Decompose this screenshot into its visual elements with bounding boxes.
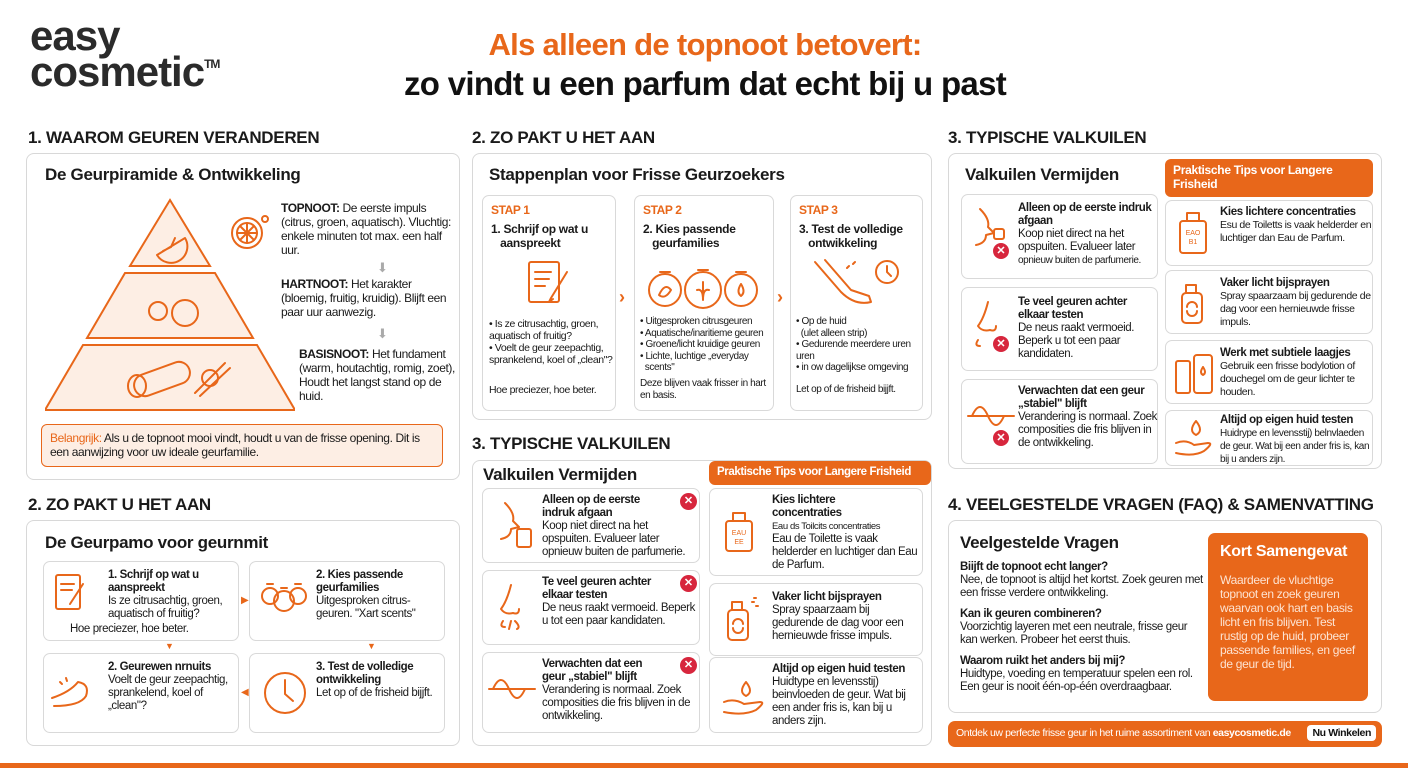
- card: tip 2: Vaker licht bijsprayen: [1220, 277, 1329, 289]
- card: tip 2: Vaker licht bijsprayen: [772, 591, 881, 603]
- card: fout 3: geur „stabiel" blijft: [542, 671, 637, 683]
- text: basisnoot: BASISNOOT: Het fundament (warm, houtachtig, romig, zoet), Houdt het langst stand op de huid.: [299, 347, 455, 403]
- card: fout 3: ✕: [684, 659, 693, 671]
- arrow down: ⬇: [377, 260, 388, 275]
- card: tip 4: [1165, 410, 1373, 466]
- panel: geurpamo: [26, 520, 460, 746]
- card: step 3: [249, 653, 445, 733]
- card: stap 2: • Aquatische/inaritieme geuren: [640, 328, 763, 338]
- pyramid chart: [45, 198, 295, 411]
- text: topnoot: TOPNOOT: De eerste impuls (citrus, groen, aquatisch). Vluchtig: enkele minuten tot max. een half uur.: [281, 201, 451, 257]
- faq text: Biijft de topnoot echt langer?: [960, 561, 1108, 573]
- heading: section 1: 1. WAAROM GEUREN VERANDEREN: [28, 128, 319, 147]
- summary box: [1208, 533, 1368, 701]
- card: tip 1: EAU: [732, 530, 746, 537]
- arrow right: ▶: [241, 595, 249, 606]
- card: step 3: 3. Test de volledige ontwikkeling: [316, 661, 413, 686]
- faq text: Voorzichtig layeren met een neutrale, frisse geur kan werken. Probeer het eerst thuis.: [960, 621, 1187, 646]
- icon: orange slice: [231, 215, 269, 249]
- panel heading: Veelgestelde Vragen: [960, 533, 1119, 552]
- card: tip 1: Eau de Toilette is vaak helderder en luchtiger dan Eau de Parfum.: [772, 533, 917, 571]
- card: stap 2: STAP 2: [643, 203, 682, 217]
- card: fout 2: De neus raakt vermoeid. Beperk u tot een paar kandidaten.: [1018, 322, 1134, 360]
- faq text: Nee, de topnoot is altijd het kortst. Zoek geuren met een frisse verdere ontwikkeling.: [960, 574, 1203, 599]
- arrow down: ⬇: [377, 326, 388, 341]
- card: stap 1: [482, 195, 616, 411]
- arrow down: ▼: [367, 641, 376, 651]
- heading: section 2 bottom: 2. ZO PAKT U HET AAN: [28, 495, 211, 514]
- banner: shop: Ontdek uw perfecte frisse geur in het ruime assortiment van easycosmetic.de: [956, 727, 1291, 739]
- card: fout 1: [961, 194, 1158, 279]
- card: fout 3: ✕: [996, 432, 1006, 444]
- logo: easy: [30, 12, 119, 59]
- card: stap 3: [790, 195, 923, 411]
- card: fout 3: Verwachten dat een geur „stabiel" blijft: [1018, 385, 1144, 410]
- summary box: Waardeer de vluchtige topnoot en zoek geuren waarvan ook hart en basis licht en fris blijven. Test rustig op de huid, probeer passende families, en geef de geur de tijd.: [1220, 573, 1355, 671]
- card: tip 1: EE: [734, 539, 744, 546]
- card: stap 2: 2. Kies passende geurfamilies: [643, 222, 736, 250]
- card: tip 4: Altijd op eigen huid testen: [1220, 414, 1353, 426]
- title: Als alleen de topnoot betovert:: [488, 27, 922, 62]
- card: stap 1: • Is ze citrusachtig, groen, aquatisch of fruitig?: [489, 318, 598, 342]
- card: tip 1: EAO: [1186, 230, 1201, 237]
- banner: shop: [948, 721, 1382, 747]
- card: stap 2: • Groene/licht kruidige geuren: [640, 339, 760, 350]
- card: tip 3: Gebruik een frisse bodylotion of douchegel om de geur lichter te houden.: [1220, 360, 1355, 398]
- heading: section 3 top: 3. TYPISCHE VALKUILEN: [948, 128, 1146, 147]
- heading: section 3 middle: 3. TYPISCHE VALKUILEN: [472, 434, 670, 453]
- card: stap 3: Let op of de frisheid bijjft.: [796, 384, 896, 395]
- card: stap 3: STAP 3: [799, 203, 838, 217]
- card: tip 2: [1165, 270, 1373, 334]
- card: tip 1: [1165, 200, 1373, 266]
- card: step 1: Hoe preciezer, hoe beter.: [70, 623, 188, 635]
- arrow down: ▼: [165, 641, 174, 651]
- card: tip 2: [709, 583, 923, 656]
- panel heading: Valkuilen Vermijden: [483, 465, 637, 484]
- card: fout 3: [482, 652, 700, 733]
- card: step 1: 1. Schrijf op wat u aanspreekt: [108, 569, 199, 594]
- card: fout 1: indruk afgaan: [542, 507, 612, 519]
- tips header: Praktische Tips voor Langere Frisheid: [1173, 163, 1332, 191]
- card: tip 1: Esu de Toiletts is vaak helderder en luchtiger dan Eau de Parfum.: [1220, 219, 1371, 244]
- faq text: Kan ik geuren combineren?: [960, 608, 1101, 620]
- card: stap 2: [634, 195, 774, 411]
- logo: cosmeticTM: [30, 48, 219, 95]
- card: fout 1: [482, 488, 700, 563]
- panel: stappenplan: [472, 153, 932, 420]
- card: stap 3: 3. Test de volledige ontwikkeling: [799, 222, 903, 250]
- card: tip 3: Huidtype en levensstij) beinvloeden de geur. Wat bij een ander fris is, kan bij u anders zijn.: [772, 676, 906, 727]
- title: [404, 27, 1006, 102]
- card: step 3: Let op of de frisheid bijjft.: [316, 687, 432, 699]
- arrow: ›: [777, 287, 783, 307]
- card: tip 3: Werk met subtiele laagjes: [1220, 347, 1350, 359]
- card: step 2: 2. Kies passende geurfamilies: [316, 569, 403, 594]
- tips header: Praktische Tips voor Langere Frisheid: [717, 466, 911, 478]
- card: stap 1: 1. Schrijf op wat u aanspreekt: [491, 222, 588, 250]
- card: fout 1: Koop niet direct na het opspuiten. Evalueer later opnieuw buiten de parfumerie.: [542, 520, 685, 558]
- card: stap 2: Deze blijven vaak frisser in hart en basis.: [640, 378, 766, 400]
- arrow: ›: [619, 287, 625, 307]
- card: fout 3: Verwachten dat een: [542, 658, 642, 670]
- summary box: Kort Samengevat: [1220, 543, 1347, 560]
- card: step 2b: 2. Geurewen nrnuits: [108, 661, 211, 673]
- card: tip 1: concentraties: [772, 507, 842, 519]
- card: tip 4: Huidrype en levensstij) belnvlaeden de geur. Wat bij een ander fris is, kan bij u anders zijn.: [1220, 428, 1369, 465]
- card: fout 1: ✕: [996, 245, 1006, 257]
- panel: geurpiramide: [26, 153, 460, 480]
- logo: [30, 12, 220, 95]
- panel heading: De Geurpamo voor geurnmit: [45, 533, 268, 552]
- card: tip 2: Spray spaarzaam bij gedurende de dag voor een hernieuwde frisse impuls.: [1220, 290, 1371, 328]
- panel heading: Stappenplan voor Frisse Geurzoekers: [489, 165, 785, 184]
- title: zo vindt u een parfum dat echt bij u past: [404, 65, 1006, 102]
- panel heading: De Geurpiramide & Ontwikkeling: [45, 165, 301, 184]
- card: fout 1: Alleen op de eerste: [542, 494, 640, 506]
- faq text: Waarom ruikt het anders bij mij?: [960, 655, 1125, 667]
- faq text: Huidtype, voeding en temperatuur spelen een rol. Een geur is nooit één-op-één overdraagbaar.: [960, 668, 1193, 693]
- card: fout 1: Alleen op de eerste indruk afgaan: [1018, 202, 1151, 227]
- card: fout 2: ✕: [684, 577, 693, 589]
- tips header: [1165, 159, 1373, 197]
- card: fout 3: Verandering is normaal. Zoek composities die fris blijven in de ontwikkeling.: [542, 684, 690, 722]
- card: tip 1: [709, 488, 923, 576]
- card: fout 1: Koop niet direct na het opspuiten. Evalueer later opnieuw buiten de parfumerie.: [1018, 228, 1141, 266]
- card: fout 3: Verandering is normaal. Zoek composities die fris blijven in de ontwikkeling.: [1018, 411, 1157, 449]
- card: step 2: [249, 561, 445, 641]
- card: tip 1: Kies lichtere concentraties: [1220, 206, 1356, 218]
- heading: section 4: 4. VEELGESTELDE VRAGEN (FAQ) & SAMENVATTING: [948, 495, 1374, 514]
- card: stap 2: • Lichte, luchtige „everyday scents": [640, 350, 748, 373]
- bottom bar: [0, 763, 1408, 768]
- card: stap 1: • Voelt de geur zeepachtig, sprankelend, koel of „clean"?: [489, 342, 612, 366]
- card: stap 3: • Op de huid: [796, 316, 846, 327]
- card: stap 2: • Uitgesproken citrusgeuren: [640, 316, 752, 327]
- card: tip 3: [1165, 340, 1373, 404]
- card: fout 2: ✕: [996, 338, 1006, 350]
- card: fout 2: [482, 570, 700, 645]
- card: fout 2: De neus raakt vermoeid. Beperk u tot een paar kandidaten.: [542, 602, 695, 627]
- panel: valkuilen right: [948, 153, 1382, 469]
- card: tip 1: Eau ds Toilcits concentraties: [772, 521, 880, 532]
- card: step 2b: [43, 653, 239, 733]
- card: stap 3: • Gedurende meerdere uren uren: [796, 339, 911, 362]
- card: step 2b: Voelt de geur zeepachtig, sprankelend, koel of „clean"?: [108, 674, 228, 712]
- card: fout 3: [961, 379, 1158, 464]
- card: tip 1: Kies lichtere: [772, 494, 835, 506]
- card: tip 3: Altijd op eigen huid testen: [772, 663, 905, 675]
- card: stap 3: (ulet alleen strip): [801, 328, 867, 338]
- card: fout 2: Te veel geuren achter elkaar testen: [1018, 296, 1127, 321]
- faq text: [960, 561, 1204, 693]
- arrow left: ◀: [241, 687, 249, 698]
- banner: shop: Nu Winkelen: [1312, 727, 1371, 739]
- text: hartnoot: HARTNOOT: Het karakter (bloemig, fruitig, kruidig). Blijft een paar uur aanwezig.: [281, 277, 446, 319]
- card: stap 1: Hoe preciezer, hoe beter.: [489, 384, 596, 396]
- callout: belangrijk: Belangrijk: Als u de topnoot mooi vindt, houdt u van de frisse opening. Dit is een aanwijzing voor uw ideale geurfamilie.: [50, 431, 420, 459]
- panel heading: Valkuilen Vermijden: [965, 165, 1119, 184]
- callout: belangrijk: [41, 424, 443, 467]
- card: stap 1: STAP 1: [491, 203, 530, 217]
- card: fout 2: [961, 287, 1158, 371]
- card: tip 3: [709, 657, 923, 733]
- card: step 1: [43, 561, 239, 641]
- card: stap 3: • in ow dagelijkse omgeving: [796, 362, 908, 373]
- heading: section 2 top: 2. ZO PAKT U HET AAN: [472, 128, 655, 147]
- tips header: [709, 461, 931, 485]
- card: fout 2: Te veel geuren achter: [542, 576, 651, 588]
- card: tip 1: B1: [1189, 239, 1197, 246]
- card: fout 1: ✕: [684, 495, 693, 507]
- card: fout 2: elkaar testen: [542, 589, 607, 601]
- card: tip 2: Spray spaarzaam bij gedurende de dag voor een hernieuwde frisse impuls.: [772, 604, 903, 642]
- panel: valkuilen middle: [472, 460, 932, 746]
- card: step 1: Is ze citrusachtig, groen, aquatisch of fruitig?: [108, 595, 222, 620]
- card: step 2: Uitgesproken citrus-geuren. "Xart scents": [316, 595, 416, 620]
- panel: faq: [948, 520, 1382, 713]
